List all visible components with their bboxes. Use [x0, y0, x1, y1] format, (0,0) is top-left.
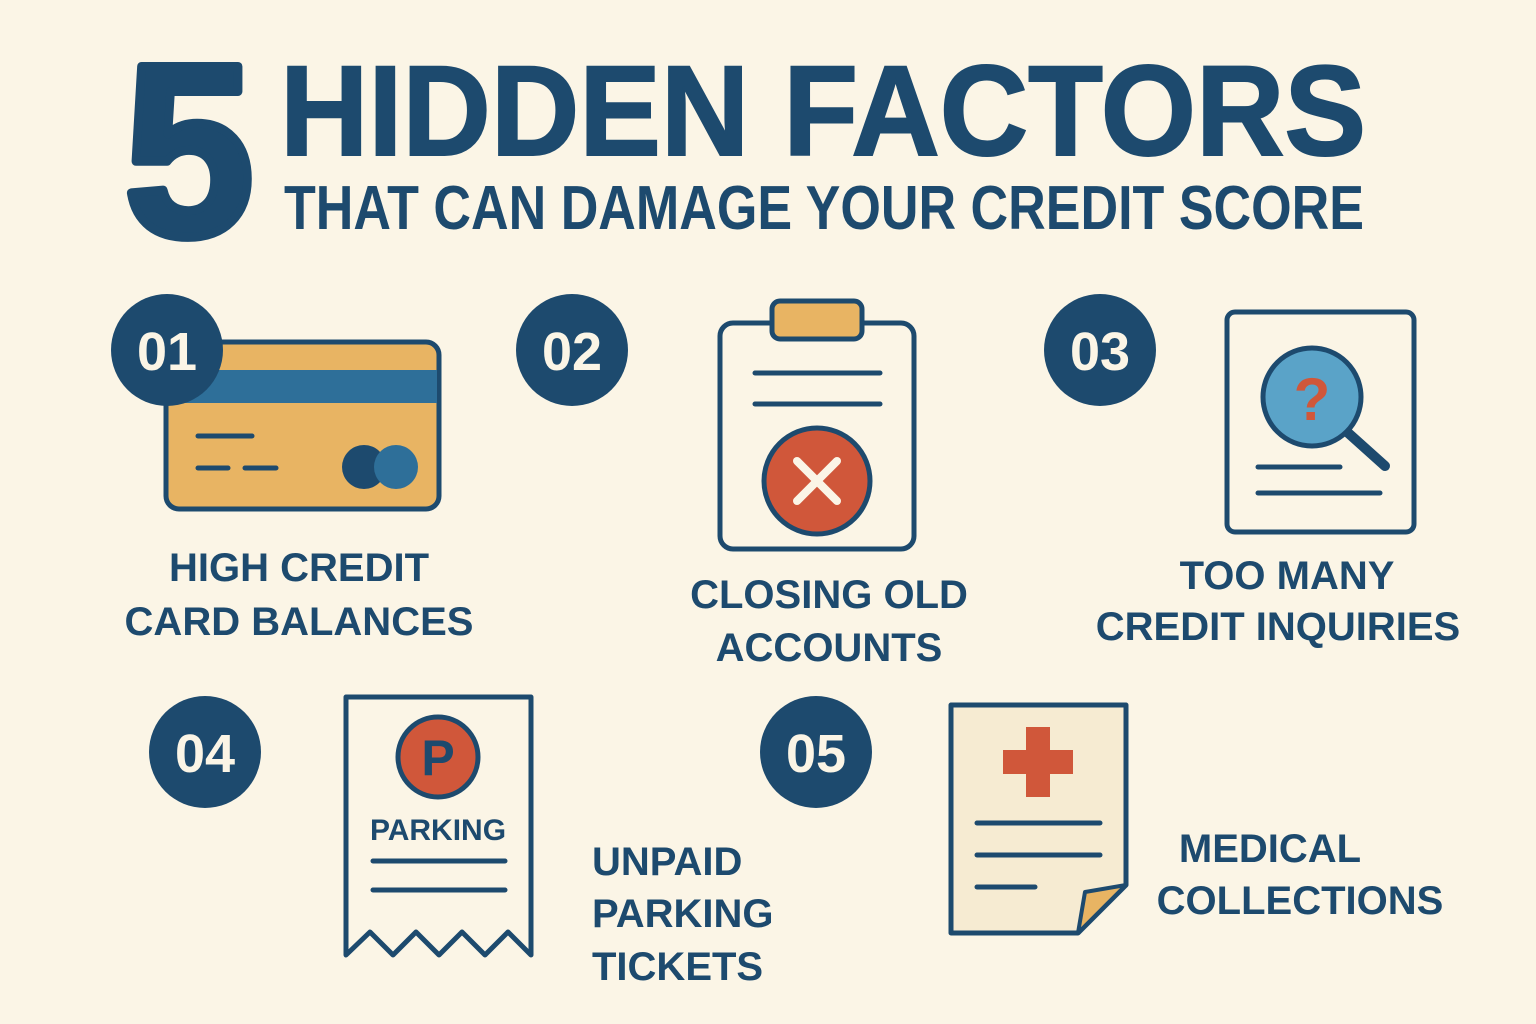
big number 5: 5 [124, 13, 254, 287]
label: TOO MANY [1180, 554, 1395, 598]
panel: 03 too many credit inquiries [1044, 294, 1460, 649]
badge 05: 05 [786, 724, 846, 784]
title [124, 13, 1366, 287]
icon: document with magnifier: ? [1294, 366, 1330, 433]
badge 05 [760, 696, 872, 808]
badge 03: 03 [1070, 322, 1130, 382]
heading: hidden factors: HIDDEN FACTORS [280, 40, 1366, 183]
icon: clipboard with x [720, 301, 914, 549]
badge 02 [516, 294, 628, 406]
label: HIGH CREDIT [169, 546, 429, 590]
badge 04: 04 [175, 724, 235, 784]
label [125, 546, 473, 644]
label [690, 573, 968, 670]
icon: medical document [951, 705, 1126, 933]
label: CLOSING OLD [690, 573, 968, 617]
subtitle: THAT CAN DAMAGE YOUR CREDIT SCORE [284, 174, 1364, 243]
icon: credit card [166, 342, 439, 509]
icon: parking ticket [346, 697, 531, 955]
label: TICKETS [592, 945, 763, 989]
badge 02: 02 [542, 322, 602, 382]
label: UNPAID [592, 840, 742, 884]
label: PARKING [592, 892, 773, 936]
icon: parking ticket: PARKING [370, 814, 506, 847]
label: CREDIT INQUIRIES [1096, 605, 1460, 649]
panel: 01 high credit card balances [111, 294, 473, 644]
icon: parking ticket: P [421, 730, 455, 786]
badge 03 [1044, 294, 1156, 406]
label: MEDICAL [1179, 827, 1361, 871]
badge 04 [149, 696, 261, 808]
badge 01: 01 [137, 322, 197, 382]
label: ACCOUNTS [716, 626, 942, 670]
icon: document with magnifier [1227, 312, 1414, 532]
label [1157, 827, 1443, 923]
panel: 05 medical collections [760, 696, 1443, 933]
label: CARD BALANCES [125, 600, 473, 644]
label [592, 840, 773, 989]
panel: 02 closing old accounts [516, 294, 968, 670]
panel: 04 unpaid parking tickets [149, 696, 773, 989]
badge 01 [111, 294, 223, 406]
label [1096, 554, 1460, 649]
label: COLLECTIONS [1157, 879, 1443, 923]
